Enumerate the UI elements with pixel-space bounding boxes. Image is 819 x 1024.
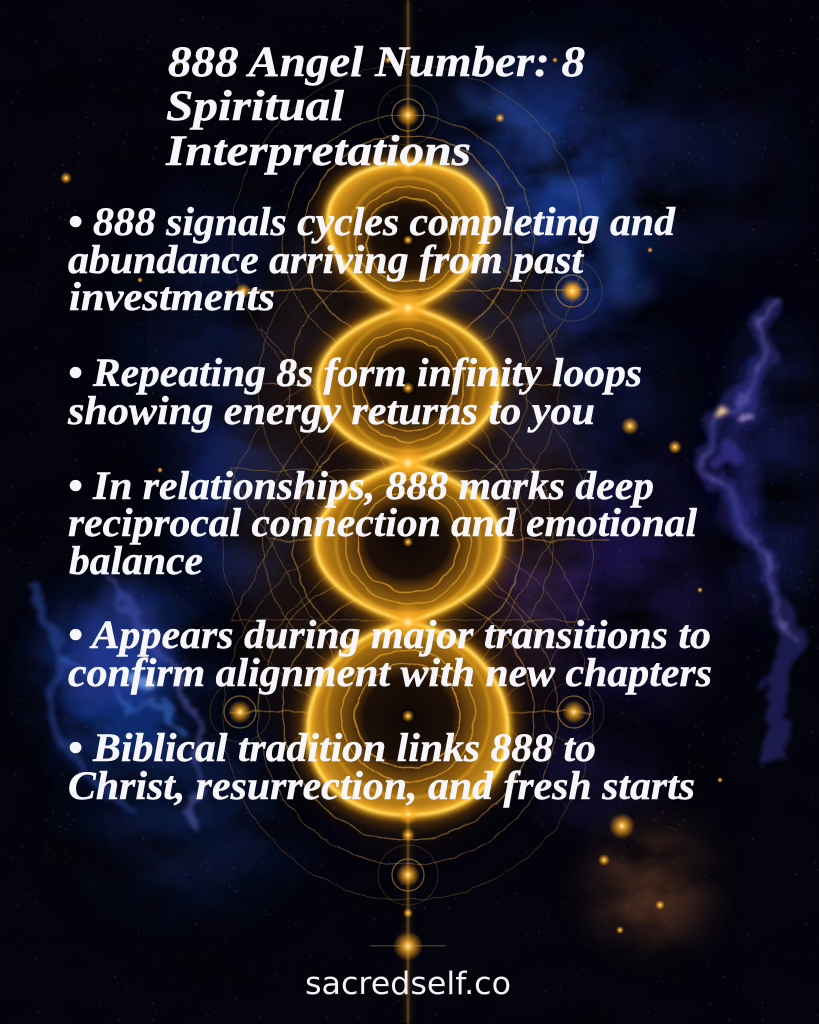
medallion nodes <box>210 85 604 961</box>
bullet: biblical tradition: Christ, resurrection, and fresh starts <box>68 763 695 808</box>
bullet: major transitions: • Appears during major transitions to <box>68 612 711 657</box>
bullet: cycles completing: • 888 signals cycles completing and <box>68 199 676 244</box>
bullet: relationships: balance <box>69 538 203 583</box>
footer website: sacredself.co <box>305 966 511 1002</box>
title: Spiritual <box>166 83 344 130</box>
bullet: infinity loops: showing energy returns to you <box>67 388 595 433</box>
bullet: infinity loops: • Repeating 8s form infinity loops <box>68 350 642 395</box>
bullet: cycles completing <box>68 199 676 319</box>
title <box>165 39 585 175</box>
title: 888 Angel Number: 8 <box>168 39 585 86</box>
nebula cloud: right ridge <box>703 300 795 760</box>
sacred geometry mesh <box>223 65 610 900</box>
nebula cloud: left ridge <box>30 580 199 830</box>
bullet: relationships <box>68 463 698 583</box>
title: Interpretations <box>165 128 471 175</box>
bullet: biblical tradition <box>68 725 695 808</box>
stars <box>60 56 723 934</box>
bullet: biblical tradition: • Biblical tradition links 888 to <box>68 725 596 770</box>
bullet: relationships: reciprocal connection and emotional <box>68 500 698 545</box>
glowing stacked figure-eight rings <box>308 154 508 825</box>
nebula soft glow <box>70 90 760 710</box>
warm haze behind rings <box>238 160 578 840</box>
vertical axis of light <box>403 0 413 1024</box>
bullet: infinity loops <box>67 350 642 433</box>
bullet: cycles completing: abundance arriving from past <box>68 237 585 282</box>
bullet: cycles completing: investments <box>69 274 275 319</box>
bullet: major transitions: confirm alignment with new chapters <box>68 650 712 695</box>
bullet: major transitions <box>68 612 712 695</box>
bullet: relationships: • In relationships, 888 marks deep <box>68 463 654 508</box>
